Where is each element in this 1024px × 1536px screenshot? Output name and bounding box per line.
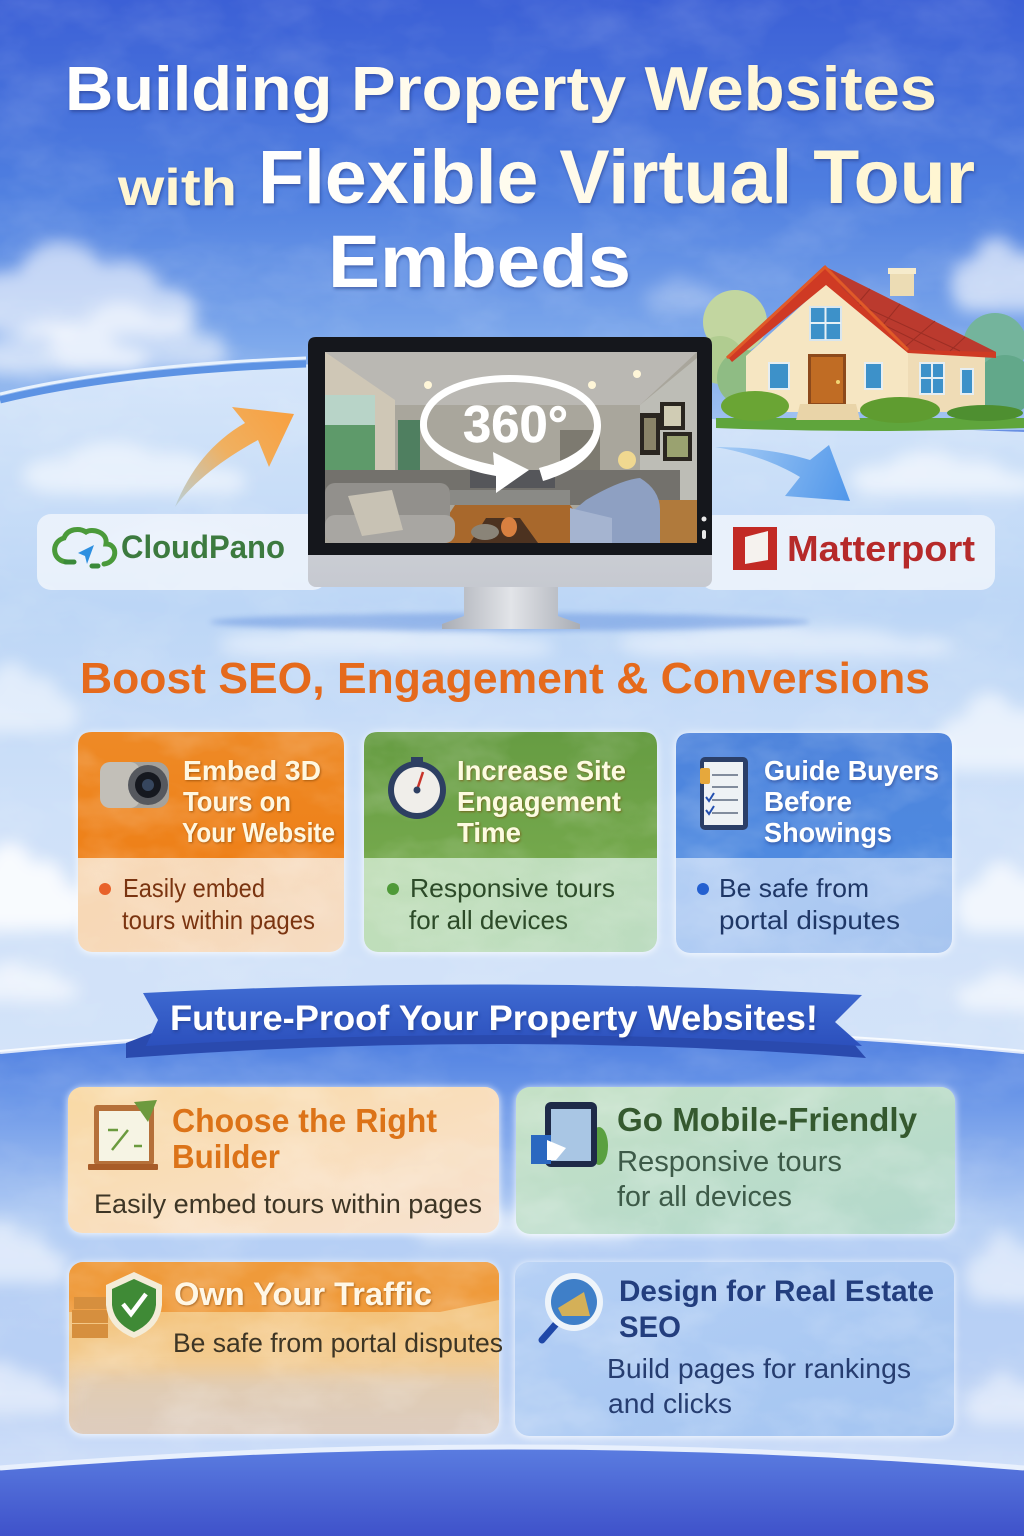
icon: clipboard with check [88, 1100, 158, 1170]
panel: go mobile-friendly: Go Mobile-Friendly [617, 1101, 918, 1138]
logo panel: Matterport [700, 515, 995, 590]
title: Embeds [328, 220, 631, 303]
panel: go mobile-friendly: for all devices [617, 1181, 792, 1213]
panel: own your traffic: Be safe from portal disputes [173, 1328, 503, 1358]
logo panel: CloudPano: CloudPano [121, 529, 285, 565]
bullet text: responsive: for all devices [409, 905, 568, 935]
heading: guide buyers [764, 755, 939, 848]
tour room photo [325, 352, 697, 543]
title: with [117, 159, 237, 217]
icon: stopwatch [388, 757, 446, 819]
bullet text: embed: tours within pages [122, 905, 315, 935]
panel: choose the right builder: Builder [172, 1138, 280, 1175]
bullet text: embed: Easily embed [123, 873, 265, 903]
house illustration [696, 266, 1024, 431]
logo panel: CloudPano [37, 514, 327, 590]
panel: increase engagement [364, 732, 657, 952]
panel: guide buyers [676, 733, 952, 953]
monitor [308, 337, 712, 629]
heading: embed 3D tours: Embed 3D [183, 755, 321, 786]
heading: increase engagement [457, 755, 626, 848]
title: Flexible Virtual Tour [258, 135, 975, 220]
heading: embed 3D tours: Your Website [182, 817, 335, 848]
bullet text: safe [697, 873, 900, 935]
bullet text: responsive: Responsive tours [410, 873, 615, 903]
bullet text: safe: Be safe from [719, 873, 869, 903]
heading: increase engagement: Engagement [457, 786, 621, 817]
icon: checklist [700, 757, 748, 830]
360 degree badge [420, 375, 601, 493]
bullet text: safe: portal disputes [719, 905, 900, 935]
bullet text: embed [99, 873, 315, 935]
icon: magnifier [542, 1273, 603, 1340]
heading: embed 3D tours [182, 755, 335, 848]
heading: guide buyers: Showings [764, 817, 892, 848]
arrow: blue to Matterport [715, 445, 850, 501]
heading: increase engagement: Increase Site [457, 755, 626, 786]
panel: go mobile-friendly: Responsive tours [617, 1146, 842, 1178]
heading: increase engagement: Time [457, 817, 521, 848]
icon: Matterport square [733, 527, 777, 570]
panel: choose the right builder [68, 1087, 499, 1233]
panel: design for real estate SEO: Build pages for rankings [607, 1353, 911, 1384]
panel: choose the right builder: Choose the Right [172, 1102, 437, 1139]
panel: choose the right builder: Easily embed tours within pages [94, 1189, 482, 1219]
heading: guide buyers: Before [764, 786, 852, 817]
panel: design for real estate SEO: Design for Real Estate [619, 1275, 934, 1308]
banner: future-proof: Future-Proof Your Property Websites! [170, 999, 818, 1038]
arrow: orange to monitor [175, 407, 294, 507]
panel: design for real estate SEO: SEO [619, 1311, 681, 1344]
heading: guide buyers: Guide Buyers [764, 755, 939, 786]
panel: go mobile-friendly [516, 1087, 955, 1234]
icon: tablet [531, 1102, 608, 1167]
panel: design for real estate SEO: and clicks [608, 1388, 732, 1419]
icon: camera [100, 762, 169, 808]
icon: shield and bricks [72, 1272, 162, 1338]
icon: CloudPano cloud [55, 530, 115, 566]
panel: embed 3D tours [78, 732, 344, 952]
heading: embed 3D tours: Tours on [183, 786, 291, 817]
panel: design for real estate SEO [515, 1262, 954, 1436]
section heading: boost: Boost SEO, Engagement & Conversions [80, 654, 930, 703]
360 degree badge: 360° [463, 396, 568, 454]
bullet text: responsive [387, 873, 615, 935]
panel: own your traffic [69, 1262, 503, 1435]
title: Building Property Websites [65, 55, 937, 124]
logo panel: Matterport: Matterport [787, 528, 975, 569]
banner: future-proof [126, 984, 866, 1058]
title [65, 55, 975, 303]
panel: own your traffic: Own Your Traffic [174, 1276, 432, 1312]
